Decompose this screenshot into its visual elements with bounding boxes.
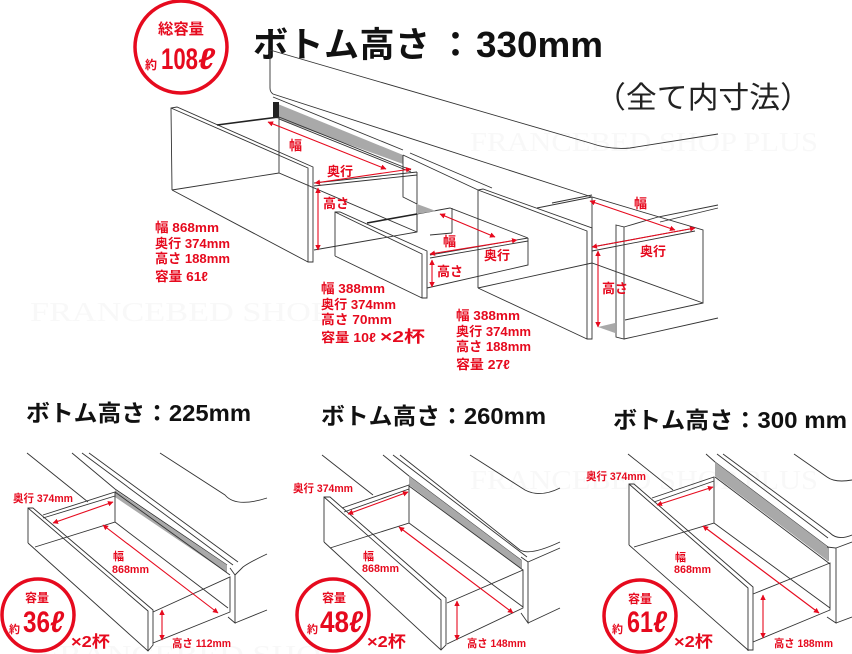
left drawer [171,107,417,262]
circle badge: 48L: ℓ [349,606,363,639]
dimension labels [293,481,526,650]
right drawer [478,189,718,339]
red dimension arrows: left drawer: 奥行 [327,164,353,179]
multiplier: ×2杯 [71,632,110,651]
circle badge: 48L [297,579,369,651]
heading: 260mm: ボトム高さ：260mm [321,403,546,429]
circle badge: total capacity [135,1,227,93]
spec list: middle drawer: 幅 388mm [321,281,385,296]
red dimension arrows: right drawer: 奥行 [640,244,666,259]
circle badge: 61L: 約 [612,622,623,636]
circle badge: 36L: 容量 [25,590,49,605]
dimension labels: 868mm [362,563,399,575]
dimension labels [13,491,231,650]
title: ： [438,26,473,65]
circle badge: 48L: 約 [307,622,318,636]
spec list: middle drawer: 高さ 70mm [321,312,392,327]
title: 330mm [476,24,603,65]
dimension labels: 奥行 374mm [293,481,353,495]
circle badge: 61L: 容量 [628,591,652,606]
circle badge: total capacity: 108 [161,43,198,76]
red dimension arrows: middle drawer: 奥行 [484,248,510,263]
spec list: left drawer: 奥行 374mm [155,236,230,251]
dimension arrows [53,502,218,640]
red dimension arrows: right drawer [590,196,695,327]
dimension labels: 奥行 374mm [13,491,73,505]
circle badge: 36L [2,579,74,651]
title [253,24,603,65]
spec list: left drawer [155,220,230,284]
panel: 260mm drawer [293,455,560,651]
dimension labels: 幅 [363,549,374,563]
drawer drawing [628,454,852,651]
spec list: middle drawer [321,281,425,346]
red dimension arrows: left drawer [268,122,411,250]
dimension labels: 868mm [674,564,711,576]
dimension labels: 幅 [675,550,686,564]
circle badge: 61L [604,580,676,652]
spec list: right drawer: 高さ 188mm [456,339,531,354]
circle badge: 48L: 48 [320,606,349,639]
dimension labels: 幅 [113,549,124,563]
spec list: right drawer [456,308,531,372]
dimension labels: 高さ 112mm [172,636,231,650]
text: FRANCEBED SHOP PLUS [470,127,818,157]
bed headboard [270,50,718,197]
dimension labels: 高さ 188mm [774,636,833,650]
spec list: middle drawer: 容量 10ℓ [321,330,376,345]
circle badge: total capacity: 総容量 [158,21,204,38]
circle badge: total capacity: 約 [145,57,157,72]
spec list: middle drawer: ×2杯 [380,327,425,346]
spec list: right drawer: 奥行 374mm [456,324,531,339]
dimension arrows [348,492,513,640]
heading: 225mm: ボトム高さ：225mm [26,400,251,426]
spec list: left drawer: 容量 61ℓ [155,269,208,284]
circle badge: 61L: ℓ [653,606,667,639]
panel: 300mm drawer [586,454,852,652]
multiplier: ×2杯 [674,632,713,651]
circle badge: 36L: ℓ [50,606,64,639]
dimension labels [586,469,833,650]
text: FRANCEBED SHOP [30,297,330,327]
spec list: left drawer: 幅 868mm [155,220,219,235]
drawer drawing [27,453,267,651]
title: ボトム高さ [253,26,430,65]
red dimension arrows: left drawer: 高さ [323,196,349,211]
panel: 225mm drawer [2,453,267,651]
red dimension arrows: middle drawer: 高さ [437,264,463,279]
main bed and drawers illustration [171,50,718,339]
dimension labels: 高さ 148mm [467,636,526,650]
spec list: middle drawer: 奥行 374mm [321,297,396,312]
dimension labels: 868mm [112,564,149,576]
red dimension arrows: middle drawer: 幅 [443,234,456,249]
note: inner dimensions: （全て内寸法） [595,82,811,115]
spec list: right drawer: 幅 388mm [456,308,520,323]
red dimension arrows: right drawer: 高さ [602,281,628,296]
text: FRANCEBED SHOP PLUS [470,465,818,495]
circle badge: 61L: 61 [627,606,653,639]
red dimension arrows: left drawer: 幅 [289,138,302,153]
dimension labels: 奥行 374mm [586,469,646,483]
circle badge: total capacity: ℓ [198,43,216,76]
circle badge: 48L: 容量 [322,590,346,605]
red dimension arrows: right drawer: 幅 [634,196,647,211]
multiplier: ×2杯 [367,632,406,651]
red dimension arrows: middle drawer [430,214,517,287]
middle drawer [335,204,528,298]
circle badge: 36L: 36 [23,606,50,639]
dimension arrows [657,487,819,638]
circle badge: 36L: 約 [9,622,20,636]
drawer drawing [322,455,560,650]
spec list: left drawer: 高さ 188mm [155,251,230,266]
spec list: right drawer: 容量 27ℓ [456,357,510,372]
heading: 300mm: ボトム高さ：300 mm [613,407,847,433]
